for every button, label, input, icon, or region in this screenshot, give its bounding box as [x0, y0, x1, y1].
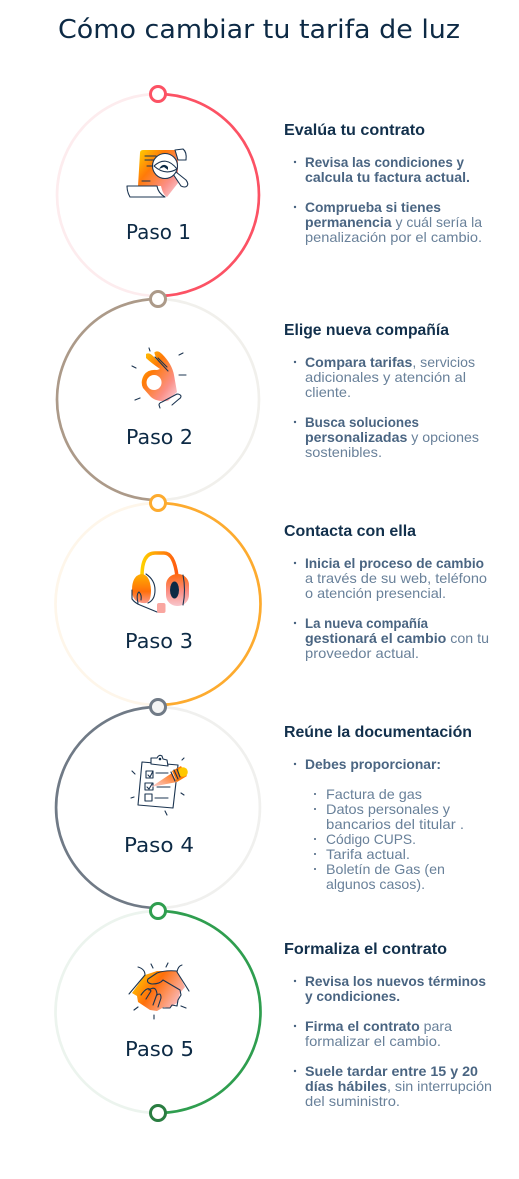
panel: step 3 ring — [55, 503, 260, 705]
text block: step 3: Inicia el proceso de cambio — [305, 555, 484, 571]
icon: handshake — [129, 963, 189, 1019]
text block: step 2 — [284, 322, 479, 460]
panel: step 2 ring — [57, 299, 259, 500]
text block: step 3 — [284, 523, 489, 661]
text block: step 4: Datos personales y — [326, 801, 450, 817]
text block: step 5: Formaliza el contrato — [284, 941, 447, 958]
text block: step 2: Elige nueva compañía — [284, 322, 449, 339]
panel: step 1 ring — [57, 94, 259, 296]
icon: OK hand — [132, 348, 186, 408]
text block: step 5: Suele tardar entre 15 y 20 — [305, 1063, 478, 1079]
text block: step 4: Debes proporcionar: — [305, 756, 441, 772]
text block: step 4: bancarios del titular . — [326, 816, 464, 832]
panel: step 4 ring — [56, 707, 260, 908]
text block: step 4: Código CUPS. — [326, 831, 416, 847]
text block: step 1: Comprueba si tienes — [305, 199, 441, 215]
text block: step 2: adicionales y atención al — [305, 369, 466, 385]
icon: clipboard checklist with pencil — [131, 755, 188, 815]
text block: step 5 — [284, 941, 492, 1109]
text block: step 3: proveedor actual. — [305, 645, 419, 661]
label: Paso 1: Paso 1 — [126, 220, 191, 244]
text block: step 2: Busca soluciones — [305, 414, 419, 430]
text block: step 5: Revisa los nuevos términos — [305, 973, 486, 989]
text block: step 5: y condiciones. — [305, 988, 400, 1004]
label: Paso 5: Paso 5 — [125, 1037, 194, 1061]
text block: step 4: algunos casos). — [326, 876, 425, 892]
panel: step 5 ring — [55, 911, 260, 1113]
text block: step 2: Compara tarifas, servicios — [305, 354, 475, 370]
title: Cómo cambiar tu tarifa de luz — [58, 15, 460, 45]
label: Paso 4: Paso 4 — [124, 833, 194, 857]
label: Paso 2: Paso 2 — [126, 425, 193, 449]
text block: step 5: del suministro. — [305, 1093, 400, 1109]
text block: step 5: formalizar el cambio. — [305, 1033, 441, 1049]
text block: step 1: calcula tu factura actual. — [305, 169, 470, 185]
text block: step 4: Tarifa actual. — [326, 846, 410, 862]
text block: step 3: Contacta con ella — [284, 523, 416, 540]
text block: step 4: Reúne la documentación — [284, 724, 472, 741]
text block: step 2: personalizadas y opciones — [305, 429, 479, 445]
text block: step 1: Revisa las condiciones y — [305, 154, 464, 170]
text block: step 1: penalización por el cambio. — [305, 229, 482, 245]
text block: step 4 — [284, 724, 472, 892]
markers — [150, 86, 166, 1120]
text block: step 5: Firma el contrato para — [305, 1018, 452, 1034]
text block: step 5: días hábiles, sin interrupción — [305, 1078, 492, 1094]
text block: step 1: Evalúa tu contrato — [284, 122, 425, 139]
text block: step 3: a través de su web, teléfono — [305, 570, 487, 586]
label: Paso 3: Paso 3 — [125, 629, 193, 653]
icon: document with magnifier — [127, 149, 188, 197]
text block: step 3: gestionará el cambio con tu — [305, 630, 489, 646]
text block: step 4: Factura de gas — [326, 786, 422, 802]
text block: step 2: sostenibles. — [305, 444, 382, 460]
text block: step 3: La nueva compañía — [305, 615, 428, 631]
text block: step 4: Boletín de Gas (en — [326, 861, 445, 877]
text block: step 1: permanencia y cuál sería la — [305, 214, 482, 230]
text block: step 3: o atención presencial. — [305, 585, 446, 601]
text block: step 1 — [284, 122, 482, 245]
icon: headset — [132, 553, 189, 613]
text block: step 2: cliente. — [305, 384, 351, 400]
